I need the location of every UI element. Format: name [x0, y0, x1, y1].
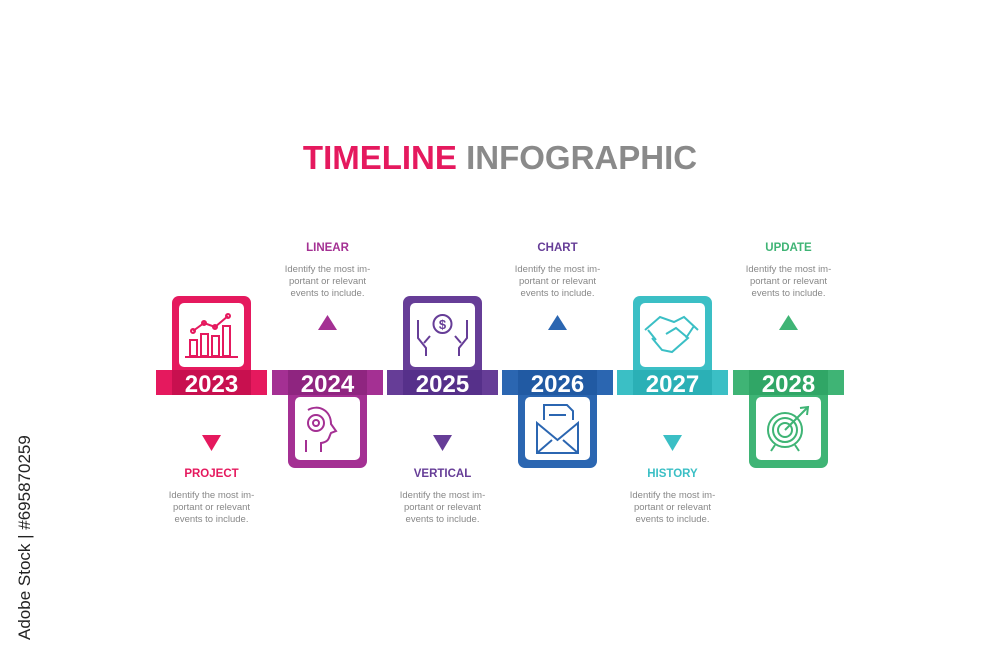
- step 2028: UPDATE: [765, 242, 812, 254]
- icon: hands with coin: [418, 315, 467, 356]
- step 2026: events to include.: [521, 288, 594, 299]
- title: TIMELINE INFOGRAPHIC: [303, 139, 697, 176]
- icon: target: [768, 407, 808, 451]
- step 2027: [617, 296, 728, 525]
- step 2023: events to include.: [175, 514, 248, 525]
- step 2023: Identify the most im-: [169, 490, 254, 501]
- step 2028: portant or relevant: [750, 276, 827, 287]
- icon: head with gear: [306, 408, 336, 452]
- step 2024: portant or relevant: [289, 276, 366, 287]
- step 2027: events to include.: [636, 514, 709, 525]
- step 2024: [272, 242, 383, 468]
- step 2028: events to include.: [752, 288, 825, 299]
- step 2026: CHART: [537, 242, 578, 254]
- step 2026: [502, 242, 613, 468]
- step 2025: [387, 296, 498, 525]
- step 2024: 2024: [301, 371, 355, 398]
- step 2025: events to include.: [406, 514, 479, 525]
- step 2026: Identify the most im-: [515, 264, 600, 275]
- step 2025: portant or relevant: [404, 502, 481, 513]
- step 2024: events to include.: [291, 288, 364, 299]
- step 2026: portant or relevant: [519, 276, 596, 287]
- step 2028: 2028: [762, 371, 815, 398]
- icon: bar chart: [185, 314, 238, 357]
- step 2027: portant or relevant: [634, 502, 711, 513]
- arrow: [202, 435, 221, 451]
- icon: handshake: [645, 317, 698, 352]
- icon: envelope: [537, 405, 578, 453]
- watermark side text: Adobe Stock | #695870259: [15, 435, 34, 640]
- step 2027: HISTORY: [647, 468, 698, 480]
- step 2024: Identify the most im-: [285, 264, 370, 275]
- step 2025: 2025: [416, 371, 469, 398]
- step 2023: 2023: [185, 371, 238, 398]
- icon: hands with coin: $: [439, 317, 447, 332]
- step 2027: 2027: [646, 371, 699, 398]
- step 2027: Identify the most im-: [630, 490, 715, 501]
- step 2023: PROJECT: [184, 468, 239, 480]
- step 2025: VERTICAL: [414, 468, 471, 480]
- step 2028: [733, 242, 844, 468]
- step 2028: Identify the most im-: [746, 264, 831, 275]
- step 2023: portant or relevant: [173, 502, 250, 513]
- step 2026: 2026: [531, 371, 584, 398]
- step 2024: LINEAR: [306, 242, 350, 254]
- step 2023: [156, 296, 267, 525]
- step 2025: Identify the most im-: [400, 490, 485, 501]
